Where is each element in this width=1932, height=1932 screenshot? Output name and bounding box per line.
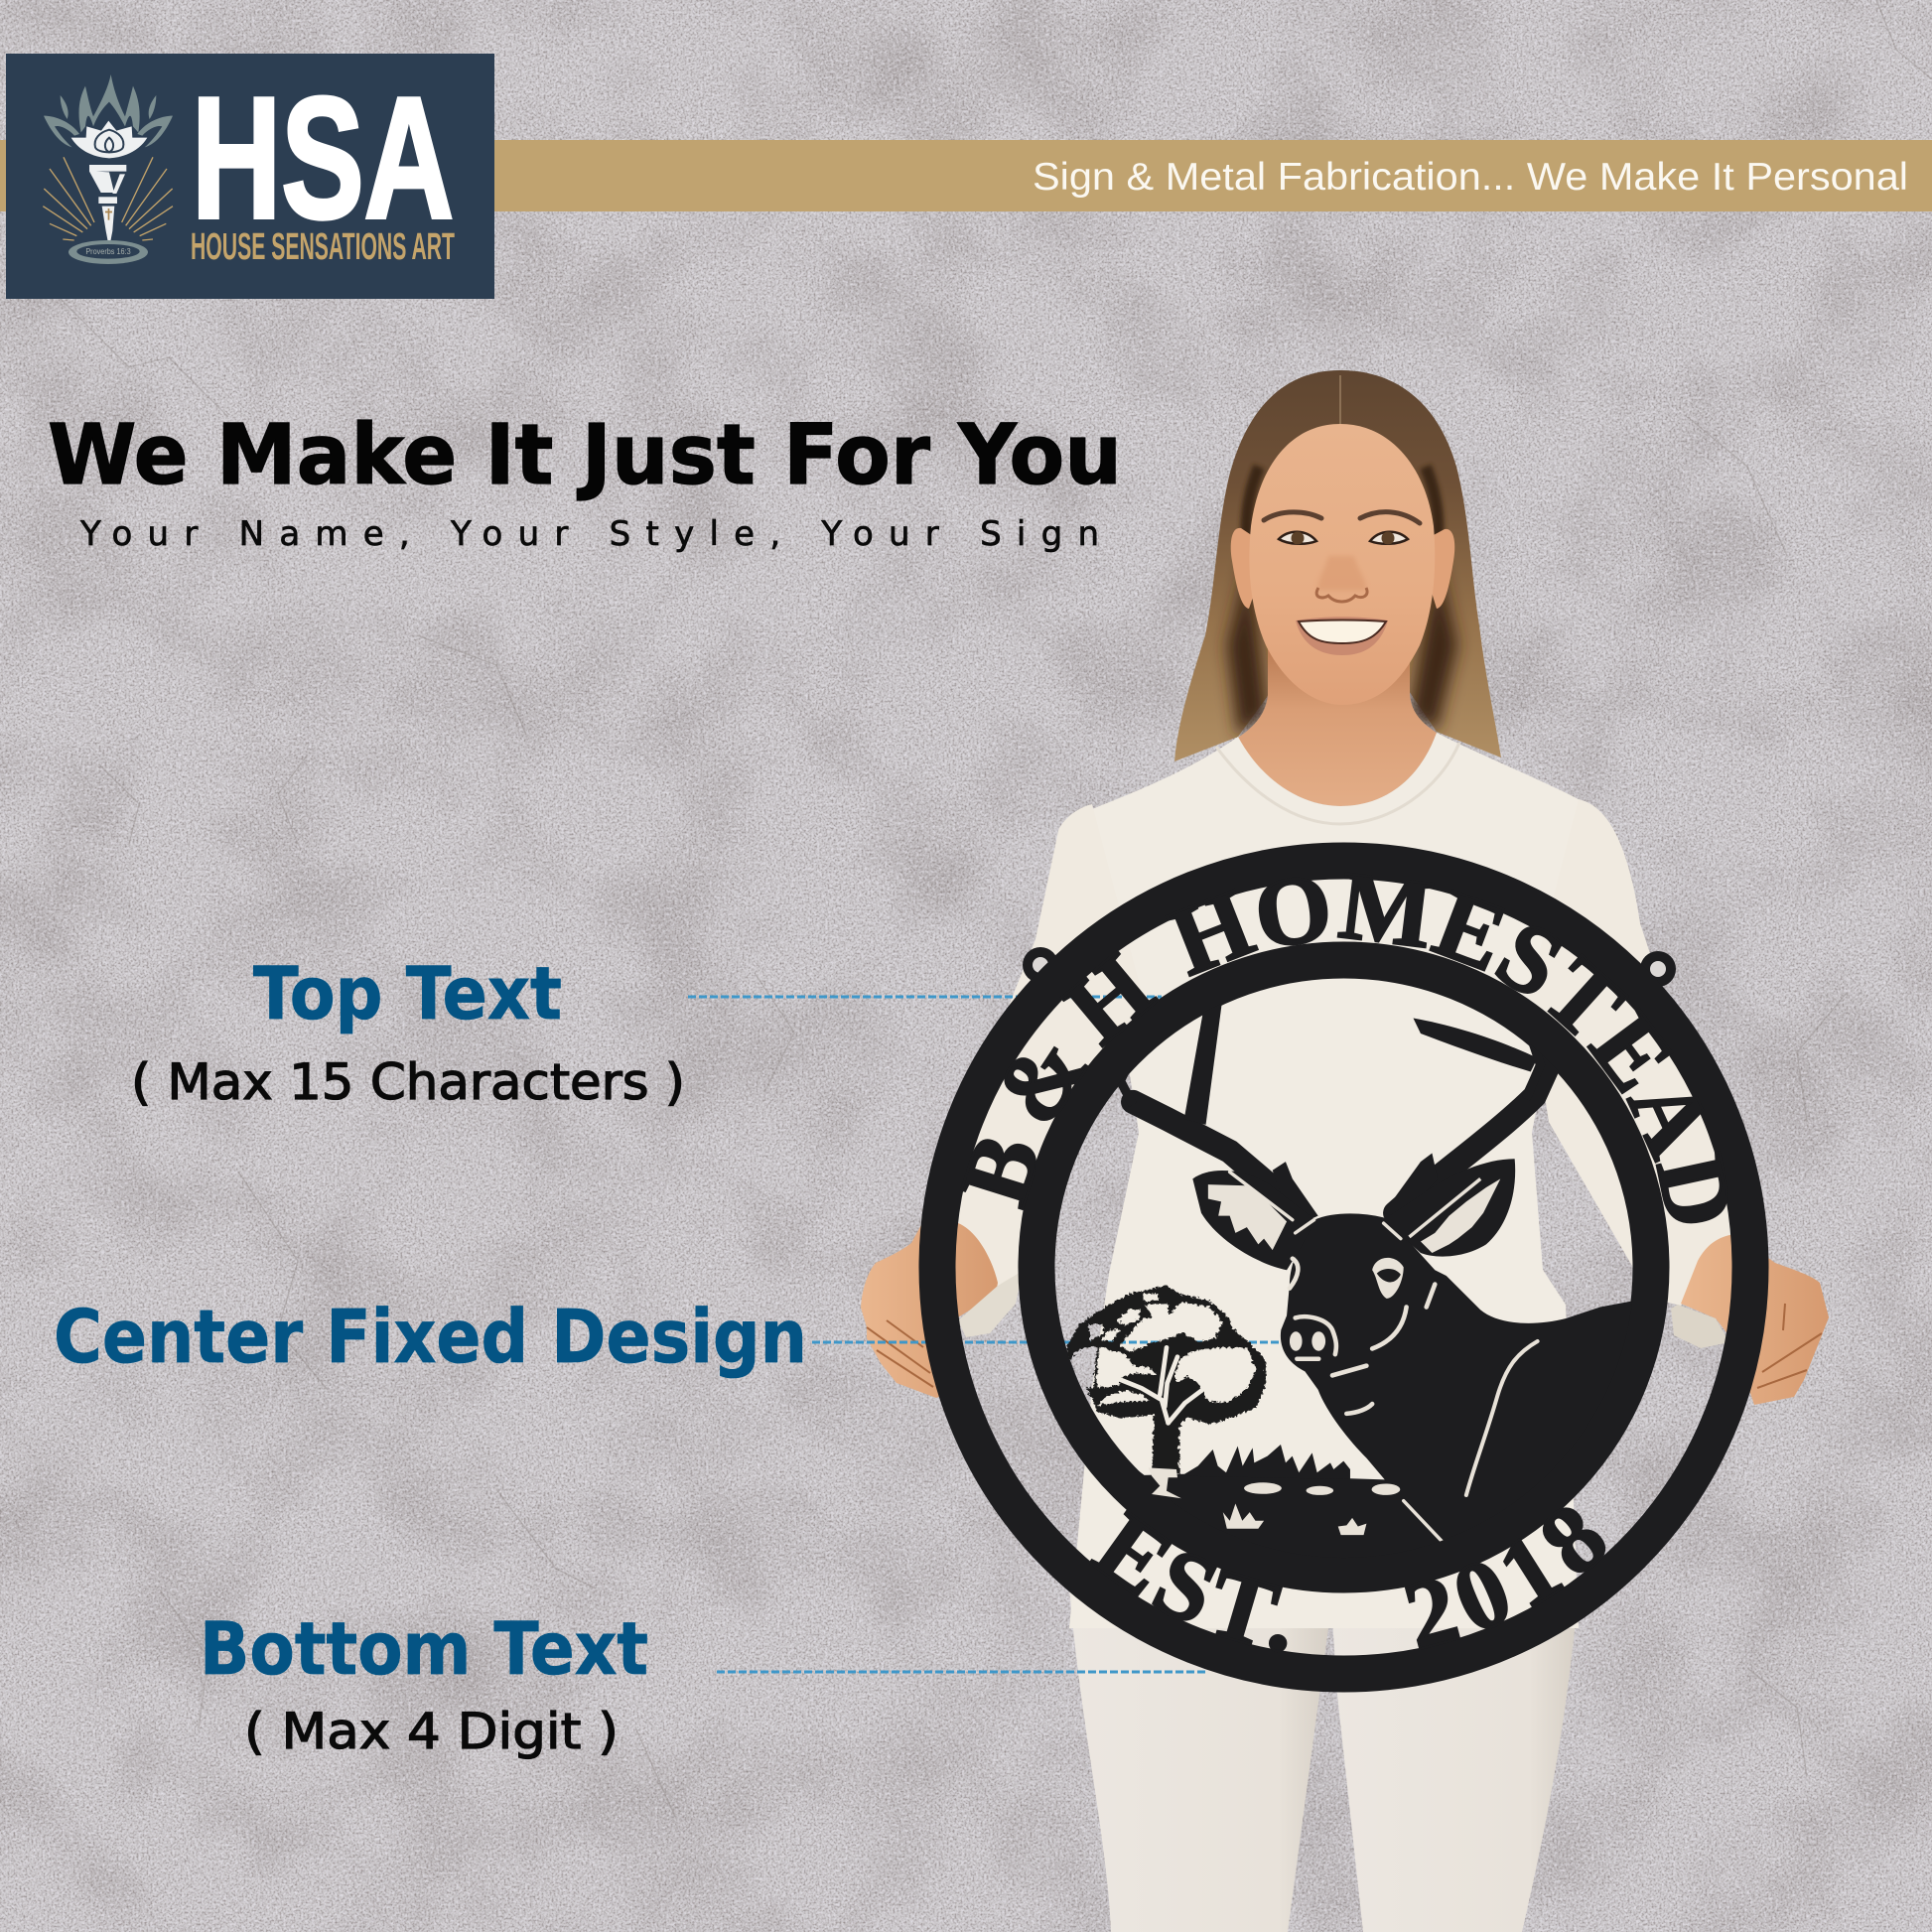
note: max 15 characters: ( Max 15 Characters ) [131,1053,685,1111]
top text: B&H: B&H [963,951,1160,1211]
face [1249,424,1435,705]
logo wordmark HSA: HSA [192,61,454,254]
left sleeve [918,804,1142,1304]
deer eye pupil [1377,1269,1401,1282]
left ear [1192,1171,1315,1270]
logo panel: HSA House Sensations Art [6,54,494,299]
bottom text: EST.: EST. [1090,1509,1287,1651]
hanging tabs [1023,947,1676,987]
note: max 4 digit: ( Max 4 Digit ) [244,1703,619,1760]
left hand [861,1221,998,1398]
leader lines [688,997,1335,1672]
shirt collar [1216,743,1459,824]
hair [1174,370,1501,761]
logo subtitle: HOUSE SENSATIONS ART [191,226,455,268]
deer eye and nostrils [1290,1258,1404,1351]
gold tagline band [0,140,1932,211]
subheading: Your Name, Your Style, Your Sign [79,514,1099,554]
person holding the sign [861,370,1829,1932]
deer body and ground [1138,1213,1630,1557]
tree base cut [1149,1467,1181,1498]
icon: torch with lotus and flame [43,74,173,264]
shirt torso [1069,733,1581,1628]
metal sign: B&H Homestead deer [919,842,1769,1692]
eyes [1279,532,1408,544]
deer face and body cut lines [1230,1172,1538,1555]
rocks and grass tufts [1223,1482,1400,1535]
right cuff [1671,1305,1729,1348]
tagline text: Sign & Metal Fabrication... We Make It Personal [1033,156,1908,199]
top text: HOMESTEAD: HOMESTEAD [1169,880,1727,1223]
tree silhouette [1065,1284,1264,1472]
tree and grass [1065,1284,1350,1498]
label: bottom text: Bottom Text [200,1607,648,1692]
label: bottom text [200,1607,648,1760]
nose [1316,556,1367,602]
grass [1181,1445,1350,1479]
heading: We Make It Just For You [48,406,1122,503]
outer ring [937,861,1750,1674]
ears [1231,528,1454,609]
bottom text: 2018: 2018 [1404,1507,1606,1648]
inner ring [1036,960,1651,1575]
neck [1238,645,1437,806]
left cuff [958,1271,1023,1337]
antlers [1120,996,1549,1227]
mouth [1296,617,1388,655]
eyebrows [1264,512,1420,523]
pants [1069,1588,1579,1932]
center fixed design [1118,1005,1630,1557]
right sleeve [1529,799,1735,1306]
curved sign text [963,880,1727,1651]
label: center fixed design: Center Fixed Design [54,1295,807,1380]
label: top text [131,952,685,1111]
icon: torch with lotus and flame: Proverbs 16:3 [85,247,131,256]
right ear [1384,1159,1515,1257]
label: top text: Top Text [253,952,562,1036]
right hand [1681,1234,1829,1405]
